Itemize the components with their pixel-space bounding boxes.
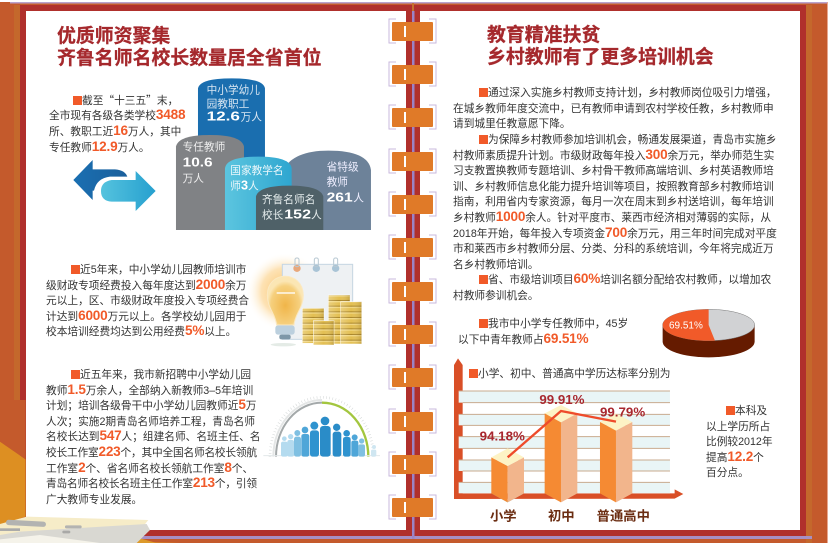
- spine line: [412, 11, 414, 539]
- bar: full-time teachers: 万人: [183, 173, 204, 185]
- text: school and staff totals: [49, 93, 186, 154]
- bar: provincial special-grade teachers: 人: [353, 192, 364, 204]
- left heading: 齐鲁名师名校长数量居全省首位: [57, 48, 321, 69]
- chart: stacked rounded bars: [176, 78, 371, 230]
- right heading: [487, 24, 714, 68]
- text: degree share increase: [706, 404, 773, 479]
- text: rural training plan: 村教师素质提升计划。市级财政每年投入300余万元，举办师范生实: [453, 147, 774, 162]
- bar: full-time teachers: [176, 135, 244, 230]
- text: rural training plan: 市和莱西市乡村教师分层、分类、分科的系统培训，今年将完成近万: [453, 243, 774, 255]
- bar: Qilu famous teachers: 齐鲁名师名: [262, 193, 315, 206]
- bar: staff: 中小学幼儿: [207, 84, 260, 97]
- text: new teachers and studios: 近五年来，我市新招聘中小学幼儿园: [80, 369, 251, 381]
- text: young teacher share: 我市中小学专任教师中，45岁: [488, 318, 628, 330]
- text: training funding: 元以上，区、市级财政年度投入专项经费合: [46, 295, 249, 307]
- text: rural training plan: 名乡村教师培训。: [453, 259, 539, 271]
- icon: light bulb, board and coins: [246, 252, 362, 346]
- text: new teachers and studios: [46, 368, 260, 506]
- value labels: 94.18%: [480, 429, 525, 444]
- text: new teachers and studios: 工作室2个、省名师名校长领航工作室8个、: [46, 460, 253, 475]
- text: training funding: [46, 264, 249, 338]
- value labels: [480, 392, 645, 444]
- text: degree share increase: 比例较2012年: [706, 436, 773, 448]
- text: rural training plan: 训、乡村教师信息化能力提升培训等项目，按照教育部乡村教师培训: [453, 181, 774, 193]
- panel: left page: [26, 11, 406, 530]
- text: degree share increase: 本科及: [735, 405, 767, 417]
- bar: provincial special-grade teachers: [283, 151, 371, 230]
- text: new teachers and studios: 青岛名师名校长名班主任工作室213个，引领: [46, 475, 257, 490]
- decoration: bottom-left book: [0, 400, 180, 543]
- text: quota for rural teachers: 村教师参训机会。: [453, 290, 539, 302]
- right heading: 乡村教师有了更多培训机会: [487, 46, 714, 68]
- text: degree share increase: 提高12.2个: [706, 449, 764, 464]
- bar: staff: 园教职工: [207, 97, 250, 110]
- chart bands: [459, 391, 670, 493]
- text: rural training plan: 习支教置换教师专题培训、乡村骨干教师高端培训、乡村英语教师培: [453, 165, 774, 177]
- text: rural training plan: 指南，利用省内专家资源，每月一次在周末到乡村送培训，每年培训: [453, 196, 774, 208]
- category labels: 普通高中: [597, 508, 650, 524]
- right heading: 教育精准扶贫: [487, 24, 600, 46]
- text: school and staff totals: 专任教师12.9万人。: [49, 139, 150, 154]
- trend line: [508, 411, 616, 457]
- text: degree share increase: 以上学历所占: [706, 421, 770, 433]
- panel: right page: [420, 11, 800, 530]
- bar: Qilu famous teachers: 校长: [262, 209, 284, 222]
- left heading: [57, 26, 321, 69]
- bar: staff: [198, 78, 265, 160]
- left heading: 优质师资聚集: [57, 26, 170, 47]
- text: training funding: 近5年来，中小学幼儿园教师培训市: [80, 264, 246, 276]
- text: new teachers and studios: 广大教师专业发展。: [46, 494, 142, 506]
- bar: national famous teachers: [225, 157, 292, 230]
- bar: full-time teachers: 10.6: [183, 155, 213, 170]
- chart axes: [454, 358, 683, 499]
- category labels: 初中: [548, 508, 575, 524]
- text: rural teacher support: [453, 86, 777, 130]
- chart: pie: 69.51%: [669, 321, 703, 332]
- chart: pie: [663, 309, 755, 357]
- text: rural training plan: 乡村教师1000余人。针对平度市、莱西市经济相对薄弱的实际，从: [453, 209, 771, 224]
- text: new teachers and studios: 名校长达到547人；组建名师、名班主任、名: [46, 428, 260, 443]
- value labels: 99.91%: [539, 392, 585, 407]
- text: chart title: 小学、初中、普通高中学历达标率分别为: [478, 368, 670, 380]
- bar: Qilu famous teachers: 152: [284, 208, 311, 222]
- text: young teacher share: [458, 318, 628, 346]
- bar: senior: [600, 413, 632, 502]
- spiral binding: [389, 19, 436, 519]
- bar: Qilu famous teachers: [256, 186, 323, 230]
- category labels: 小学: [490, 508, 517, 524]
- bar: full-time teachers: 专任教师: [183, 141, 226, 154]
- bar: Qilu famous teachers: 人: [311, 210, 322, 222]
- bar: junior: [545, 405, 577, 502]
- text: rural training plan: 2018年开始，每年投入专项资金700余万元，用三年时间完成对平度: [453, 225, 777, 240]
- value labels: 99.79%: [600, 404, 645, 419]
- text: school and staff totals: 截至“十三五”末，: [82, 93, 178, 108]
- text: quota for rural teachers: 省、市级培训项目60%培训名额分配给农村教师，以增加农: [488, 271, 771, 286]
- text: new teachers and studios: 计划；培训各级骨干中小学幼儿园教师近5万: [46, 397, 256, 412]
- text: degree share increase: 百分点。: [706, 467, 749, 479]
- bar: provincial special-grade teachers: 教师: [327, 175, 348, 188]
- bar: staff: 万人: [241, 112, 262, 124]
- chart: attainment bar chart: [454, 358, 683, 524]
- text: training funding: 校本培训经费均达到公用经费5%以上。: [46, 323, 236, 338]
- text: training funding: 级财政专项经费投入每年度达到2000余万: [46, 277, 246, 292]
- icon: double arrows: [73, 160, 156, 211]
- text: training funding: 计达到6000万元以上。各学校幼儿园用于: [46, 308, 246, 323]
- text: school and staff totals: 全市现有各级各类学校3488: [49, 107, 185, 122]
- text: young teacher share: 以下中青年教师占69.51%: [458, 331, 588, 346]
- bar: national famous teachers: 师3人: [230, 178, 259, 192]
- text: new teachers and studios: 校长工作室223个，其中全国名师名校长领航: [46, 444, 257, 459]
- bar: primary: [491, 448, 524, 502]
- text: rural teacher support: 请到城里任教意愿下降。: [453, 118, 571, 130]
- text: school and staff totals: 所、教职工近16万人，其中: [49, 123, 181, 138]
- icon: gauge with crowd: [263, 397, 380, 457]
- text: rural training plan: 为保障乡村教师参加培训机会，畅通发展渠道，青岛市实施乡: [488, 134, 777, 146]
- bar: provincial special-grade teachers: 省特级: [327, 161, 359, 174]
- text: quota for rural teachers: [453, 271, 771, 302]
- bar: provincial special-grade teachers: 261: [327, 190, 353, 204]
- category labels: [490, 508, 650, 524]
- text: new teachers and studios: 教师1.5万余人，全部纳入新教师3–5年培训: [46, 382, 253, 397]
- bar: staff: 12.6: [207, 109, 240, 124]
- bar: national famous teachers: 国家教学名: [230, 164, 284, 177]
- text: rural teacher support: 通过深入实施乡村教师支持计划，乡村教师岗位吸引力增强，: [488, 87, 777, 99]
- text: rural training plan: [453, 134, 777, 271]
- text: new teachers and studios: 人次；实施2期青岛名师培养工程，青岛名师: [46, 416, 255, 428]
- text: rural teacher support: 在城乡教师年度交流中，已有教师申请到农村学校任教，乡村教师申: [453, 103, 774, 115]
